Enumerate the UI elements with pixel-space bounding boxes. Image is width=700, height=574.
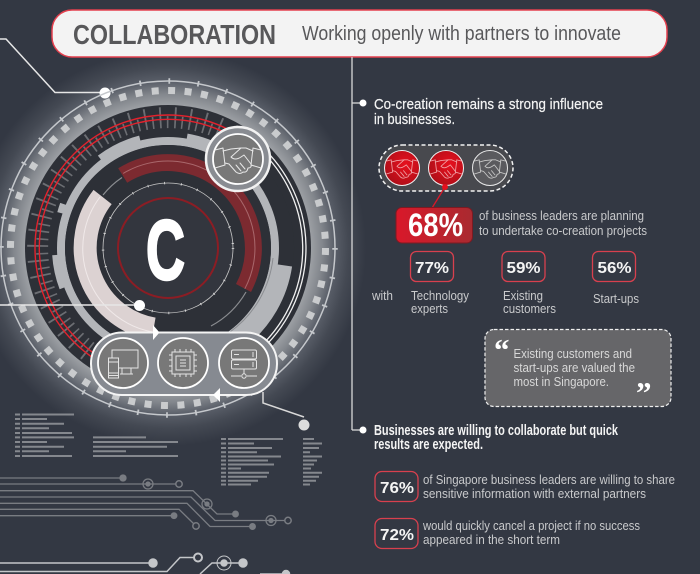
text: willing to share: sensitive information with external partners (423, 487, 646, 501)
small data lines: block 3 (221, 438, 283, 486)
text: business leaders planning (479, 209, 647, 238)
circuit traces: lower group (0, 554, 290, 574)
labels for partner stats: Technology (411, 289, 470, 303)
section heading: co-creation: in businesses. (374, 111, 455, 128)
callout: Singapore quote: Existing customers and (514, 347, 632, 361)
section heading: quick results (374, 423, 619, 453)
circuit traces: upper group (0, 475, 291, 529)
stat: 76% (375, 472, 418, 502)
icon: devices (98, 338, 148, 388)
technology pill (91, 325, 277, 402)
radial glow behind dial (0, 50, 366, 446)
section heading: quick results: Businesses are willing to collaborate but quick (374, 423, 619, 439)
labels for partner stats: experts (411, 302, 448, 316)
small data lines: block 4 (303, 438, 322, 486)
callout: Singapore quote (485, 330, 671, 410)
text: willing to share: of Singapore business leaders are willing to share (423, 473, 675, 487)
labels for partner stats: Start-ups (593, 292, 639, 306)
icon: grey handshake (472, 150, 508, 186)
handshake icons pill (379, 145, 513, 191)
icon: processor chip (158, 338, 208, 388)
arrow: right pointing (153, 325, 160, 340)
connector: top left to dial (0, 39, 110, 98)
labels for partner stats (371, 289, 639, 316)
stat: 56%: 56% (598, 260, 632, 277)
text: quickly cancel: would quickly cancel a project if no success (422, 519, 640, 533)
arrow: left pointing (213, 388, 220, 402)
text: business leaders planning: to undertake co-creation projects (479, 224, 647, 238)
labels for partner stats: Existing (503, 289, 543, 303)
heading: COLLABORATION (73, 19, 276, 50)
stat: 72%: 72% (380, 527, 414, 544)
stat: 68%: 68% (408, 207, 463, 243)
title banner (52, 10, 667, 57)
text: willing to share (423, 473, 675, 501)
stat: 72% (375, 518, 418, 548)
icon: handshake badge (206, 127, 270, 191)
labels for partner stats: with (371, 289, 393, 303)
connector: left to dial (0, 300, 145, 311)
stat: 56% (592, 252, 636, 282)
connector: pill to dot (263, 392, 310, 430)
stat: 77% (410, 252, 454, 282)
section heading: quick results: results are expected. (374, 437, 483, 453)
subtitle: Working openly with partners to innovate (302, 23, 621, 45)
text: business leaders planning: of business leaders are planning (479, 209, 644, 223)
small data lines: block 1 (15, 414, 74, 457)
section heading: co-creation: Co-creation remains a strong influence (374, 96, 603, 113)
text: quickly cancel: appeared in the short term (423, 533, 560, 547)
icon: red handshake 2 (428, 150, 464, 186)
dial letter C: C (146, 203, 185, 297)
stat: 59%: 59% (506, 260, 540, 277)
vertical timeline with markers (352, 57, 366, 434)
icon: servers (219, 338, 269, 388)
pointer from handshake to 68% (432, 184, 448, 208)
circular dial (1, 81, 335, 415)
stat: 76%: 76% (380, 480, 414, 497)
stat: 77%: 77% (415, 260, 449, 277)
callout: Singapore quote: start-ups are valued the (514, 361, 635, 375)
text: quickly cancel (422, 519, 640, 547)
small data lines: block 2 (93, 436, 178, 457)
labels for partner stats: customers (503, 302, 556, 316)
stat: 59% (502, 252, 545, 282)
icon: red handshake 1 (384, 150, 420, 186)
section heading: co-creation (374, 96, 603, 128)
callout: Singapore quote: most in Singapore. (514, 375, 609, 389)
closing quote mark: ” (636, 375, 652, 410)
opening quote mark: “ (494, 332, 510, 367)
